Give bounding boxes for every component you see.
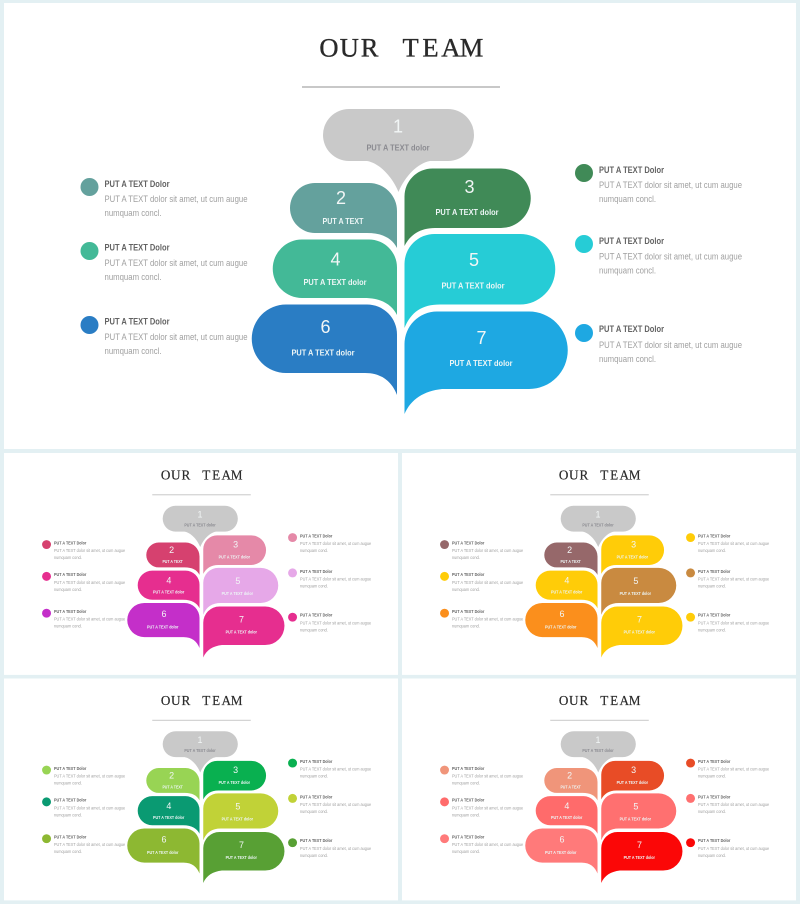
right item 2: PUT A TEXT dolor sit amet, ut cum augue: [599, 252, 742, 262]
left item 1: PUT A TEXT Dolor: [104, 179, 170, 189]
bubble 1: 1: [596, 509, 601, 519]
left item 2: PUT A TEXT Dolor: [54, 572, 87, 577]
right item 3: [575, 324, 742, 364]
left item 3: PUT A TEXT Dolor: [54, 834, 87, 839]
right item 1: PUT A TEXT dolor sit amet, ut cum augue: [698, 541, 770, 546]
right item 1: PUT A TEXT Dolor: [698, 534, 731, 539]
left item 1: [42, 540, 126, 560]
left item 1: PUT A TEXT dolor sit amet, ut cum augue: [104, 194, 248, 204]
bubble 5: 5: [469, 250, 479, 270]
left item 3: [440, 609, 524, 629]
bubble 1: PUT A TEXT dolor: [582, 522, 614, 527]
bubble 1: PUT A TEXT dolor: [582, 748, 614, 753]
left item 2: numquam concl.: [452, 812, 480, 817]
right item 3: [288, 838, 372, 858]
bubble 1: [323, 109, 474, 192]
right item 2: numquam concl.: [300, 809, 328, 814]
left item 2: numquam concl.: [54, 587, 82, 592]
left item 3: numquam concl.: [452, 624, 480, 629]
bubble 6: [525, 828, 598, 874]
bubble 2: 2: [336, 188, 346, 208]
right item 3: PUT A TEXT dolor sit amet, ut cum augue: [300, 621, 372, 626]
left item 3: [80, 316, 248, 356]
bubble 5: [601, 568, 676, 615]
left item 3: PUT A TEXT Dolor: [104, 316, 170, 326]
bubble 4: [138, 796, 200, 834]
right item 1: PUT A TEXT dolor sit amet, ut cum augue: [300, 541, 372, 546]
title: OUR TEAM: [161, 468, 243, 483]
left item 1: numquam concl.: [104, 208, 162, 218]
bubble 7: PUT A TEXT dolor: [226, 855, 257, 860]
right item 2: numquam concl.: [698, 584, 726, 589]
bubble 3: 3: [464, 177, 475, 197]
bubble 1: 1: [596, 735, 601, 745]
right item 2: PUT A TEXT dolor sit amet, ut cum augue: [698, 802, 770, 807]
left item 2: [440, 572, 524, 592]
right item 2: PUT A TEXT Dolor: [599, 236, 664, 246]
left item 2: numquam concl.: [452, 587, 480, 592]
right item 2: numquam concl.: [599, 266, 656, 276]
right item 1: numquam concl.: [698, 774, 726, 779]
right item 2: PUT A TEXT Dolor: [698, 569, 731, 574]
right item 1: [288, 533, 372, 553]
bubble 1: [561, 506, 636, 547]
bubble 3: 3: [233, 765, 238, 775]
title: OUR TEAM: [319, 33, 483, 63]
left item 2: PUT A TEXT dolor sit amet, ut cum augue: [452, 580, 524, 585]
bubble 7: [601, 832, 682, 883]
right item 3: PUT A TEXT Dolor: [599, 324, 664, 334]
bubble 2: PUT A TEXT: [322, 216, 364, 226]
title: OUR TEAM: [559, 693, 641, 708]
bubble 3: 3: [631, 540, 636, 550]
bubble 2: [544, 768, 598, 800]
right item 3: [686, 613, 770, 633]
bubble 7: PUT A TEXT dolor: [450, 358, 513, 368]
bubble 6: PUT A TEXT dolor: [147, 624, 179, 629]
left item 1: PUT A TEXT dolor sit amet, ut cum augue: [452, 548, 524, 553]
left item 3: numquam concl.: [54, 624, 82, 629]
title: OUR TEAM: [559, 468, 641, 483]
right item 2: [686, 568, 770, 589]
bubble 7: [203, 832, 284, 883]
left item 3: numquam concl.: [452, 849, 480, 854]
left item 1: [440, 540, 524, 560]
bubble 3: PUT A TEXT dolor: [617, 554, 648, 559]
bubble 1: [561, 731, 636, 773]
right item 1: [686, 759, 770, 779]
bubble 5: PUT A TEXT dolor: [222, 591, 253, 596]
bubble 5: 5: [633, 801, 638, 811]
left item 2: numquam concl.: [104, 272, 162, 282]
panel: main teal-blue slide: [4, 3, 796, 449]
left item 2: PUT A TEXT Dolor: [452, 798, 485, 803]
bubble 3: [203, 761, 266, 799]
bubble 1: [163, 506, 238, 547]
bubble 1: 1: [393, 116, 403, 136]
right item 3: PUT A TEXT Dolor: [300, 838, 333, 843]
bubble 2: 2: [169, 545, 174, 555]
bubble 2: 2: [169, 770, 174, 780]
right item 2: [686, 794, 770, 814]
left item 2: PUT A TEXT Dolor: [104, 242, 170, 252]
bubble 2: PUT A TEXT: [560, 559, 581, 564]
bubble 2: [146, 768, 200, 800]
right item 3: PUT A TEXT dolor sit amet, ut cum augue: [698, 846, 770, 851]
bubble 6: 6: [559, 609, 564, 619]
bubble 3: 3: [631, 765, 636, 775]
bubble 5: [601, 793, 676, 840]
bubble 5: PUT A TEXT dolor: [442, 280, 505, 290]
bubble 7: [601, 606, 682, 657]
bubble 7: 7: [637, 615, 642, 625]
bubble 4: 4: [166, 801, 171, 811]
right item 2: PUT A TEXT dolor sit amet, ut cum augue: [300, 802, 372, 807]
bubble 1: 1: [198, 509, 203, 519]
left item 2: [42, 572, 126, 592]
right item 3: PUT A TEXT dolor sit amet, ut cum augue: [599, 340, 742, 350]
bubble 4: 4: [564, 801, 569, 811]
bubble 3: [203, 535, 266, 574]
bubble 5: [203, 793, 278, 840]
right item 1: numquam concl.: [300, 774, 328, 779]
bubble 3: PUT A TEXT dolor: [617, 780, 648, 785]
right item 1: PUT A TEXT Dolor: [599, 165, 664, 175]
bubble 6: [252, 304, 397, 395]
right item 2: PUT A TEXT dolor sit amet, ut cum augue: [698, 577, 770, 582]
left item 3: PUT A TEXT dolor sit amet, ut cum augue: [54, 617, 126, 622]
bubble 7: PUT A TEXT dolor: [624, 855, 655, 860]
bubble 2: 2: [567, 545, 572, 555]
right item 1: numquam concl.: [599, 194, 656, 204]
bubble 4: [536, 571, 598, 608]
bubble 4: PUT A TEXT dolor: [153, 589, 185, 594]
bubble 6: 6: [320, 317, 331, 337]
bubble 1: PUT A TEXT dolor: [184, 748, 216, 753]
left item 3: PUT A TEXT Dolor: [452, 834, 485, 839]
right item 1: PUT A TEXT dolor sit amet, ut cum augue: [599, 180, 742, 190]
bubble 6: [127, 603, 200, 648]
right item 1: [288, 759, 372, 779]
panel: green slide: [4, 678, 398, 900]
bubble 3: PUT A TEXT dolor: [436, 207, 499, 217]
left item 1: [42, 766, 126, 785]
panel: red slide: [402, 678, 796, 900]
right item 2: numquam concl.: [698, 809, 726, 814]
left item 1: PUT A TEXT Dolor: [452, 766, 485, 771]
right item 1: PUT A TEXT Dolor: [698, 759, 731, 764]
bubble 1: [163, 731, 238, 773]
right item 2: PUT A TEXT Dolor: [300, 569, 333, 574]
left item 2: numquam concl.: [54, 812, 82, 817]
left item 1: PUT A TEXT Dolor: [54, 766, 87, 771]
bubble 2: PUT A TEXT: [560, 784, 581, 789]
left item 3: PUT A TEXT Dolor: [452, 609, 485, 614]
right item 3: PUT A TEXT Dolor: [698, 838, 731, 843]
right item 3: PUT A TEXT dolor sit amet, ut cum augue: [300, 846, 372, 851]
title: OUR TEAM: [161, 693, 243, 708]
right item 3: [686, 838, 770, 858]
right item 1: PUT A TEXT Dolor: [300, 759, 333, 764]
left item 2: PUT A TEXT dolor sit amet, ut cum augue: [452, 805, 524, 810]
bubble 5: 5: [633, 576, 638, 586]
right item 2: numquam concl.: [300, 584, 328, 589]
right item 2: [288, 568, 372, 589]
left item 3: PUT A TEXT dolor sit amet, ut cum augue: [452, 617, 524, 622]
bubble 1: PUT A TEXT dolor: [366, 142, 430, 152]
right item 3: PUT A TEXT Dolor: [300, 613, 333, 618]
left item 1: numquam concl.: [54, 555, 82, 560]
right item 3: PUT A TEXT dolor sit amet, ut cum augue: [698, 621, 770, 626]
bubble 6: PUT A TEXT dolor: [147, 850, 179, 855]
bubble 2: PUT A TEXT: [162, 784, 183, 789]
bubble 5: 5: [235, 801, 240, 811]
left item 1: PUT A TEXT dolor sit amet, ut cum augue: [54, 774, 126, 779]
bubble 6: 6: [161, 609, 166, 619]
left item 2: PUT A TEXT dolor sit amet, ut cum augue: [54, 805, 126, 810]
left item 3: PUT A TEXT dolor sit amet, ut cum augue: [54, 842, 126, 847]
left item 1: PUT A TEXT Dolor: [452, 541, 485, 546]
right item 3: numquam concl.: [300, 853, 328, 858]
right item 3: PUT A TEXT Dolor: [698, 613, 731, 618]
bubble 3: 3: [233, 540, 238, 550]
left item 3: [42, 609, 126, 629]
right item 2: PUT A TEXT Dolor: [300, 794, 333, 799]
left item 1: [440, 766, 524, 785]
bubble 3: [404, 168, 531, 246]
left item 2: PUT A TEXT dolor sit amet, ut cum augue: [54, 580, 126, 585]
bubble 6: [127, 828, 200, 874]
right item 2: PUT A TEXT dolor sit amet, ut cum augue: [300, 577, 372, 582]
bubble 3: [601, 761, 664, 799]
left item 3: [42, 834, 126, 854]
left item 2: PUT A TEXT dolor sit amet, ut cum augue: [104, 258, 248, 268]
right item 3: numquam concl.: [300, 628, 328, 633]
bubble 5: 5: [235, 576, 240, 586]
bubble 2: [544, 543, 598, 575]
right item 3: numquam concl.: [599, 354, 656, 364]
left item 3: [440, 834, 524, 854]
bubble 5: PUT A TEXT dolor: [222, 817, 253, 822]
bubble 3: PUT A TEXT dolor: [219, 780, 250, 785]
left item 1: numquam concl.: [452, 780, 480, 785]
bubble 6: PUT A TEXT dolor: [545, 850, 577, 855]
bubble 5: PUT A TEXT dolor: [620, 591, 651, 596]
left item 3: PUT A TEXT Dolor: [54, 609, 87, 614]
bubble 4: [138, 571, 200, 608]
bubble 5: PUT A TEXT dolor: [620, 817, 651, 822]
right item 2: [288, 794, 372, 814]
right item 3: [288, 613, 372, 633]
left item 1: [80, 178, 248, 218]
right item 3: numquam concl.: [698, 628, 726, 633]
bubble 1: PUT A TEXT dolor: [184, 522, 216, 527]
left item 3: PUT A TEXT dolor sit amet, ut cum augue: [104, 332, 248, 342]
right item 2: PUT A TEXT Dolor: [698, 794, 731, 799]
bubble 4: 4: [166, 576, 171, 586]
right item 1: numquam concl.: [300, 548, 328, 553]
panel: yellow-orange slide: [402, 453, 796, 675]
bubble 4: [536, 796, 598, 834]
bubble 6: [525, 603, 598, 648]
bubble 4: PUT A TEXT dolor: [153, 815, 185, 820]
right item 2: [575, 235, 742, 276]
right item 1: numquam concl.: [698, 548, 726, 553]
bubble 4: PUT A TEXT dolor: [551, 815, 583, 820]
bubble 7: 7: [239, 615, 244, 625]
bubble 7: 7: [637, 840, 642, 850]
bubble 4: 4: [564, 576, 569, 586]
right item 1: [686, 533, 770, 553]
left item 2: [80, 242, 248, 282]
bubble 2: PUT A TEXT: [162, 559, 183, 564]
left item 1: PUT A TEXT Dolor: [54, 541, 87, 546]
right item 1: PUT A TEXT Dolor: [300, 534, 333, 539]
right item 1: [575, 164, 742, 204]
bubble 4: 4: [330, 250, 341, 270]
bubble 3: [601, 535, 664, 574]
bubble 7: PUT A TEXT dolor: [624, 630, 655, 635]
bubble 6: PUT A TEXT dolor: [545, 624, 577, 629]
left item 3: numquam concl.: [104, 346, 162, 356]
bubble 6: 6: [559, 835, 564, 845]
bubble 2: [146, 543, 200, 575]
left item 3: numquam concl.: [54, 849, 82, 854]
left item 1: PUT A TEXT dolor sit amet, ut cum augue: [54, 548, 126, 553]
left item 2: [440, 797, 524, 817]
bubble 7: [203, 606, 284, 657]
bubble 7: [404, 312, 568, 414]
left item 2: PUT A TEXT Dolor: [452, 572, 485, 577]
bubble 2: 2: [567, 770, 572, 780]
bubble 4: [273, 240, 397, 315]
bubble 4: PUT A TEXT dolor: [304, 277, 367, 287]
right item 1: PUT A TEXT dolor sit amet, ut cum augue: [698, 767, 770, 772]
bubble 7: PUT A TEXT dolor: [226, 630, 257, 635]
left item 2: [42, 797, 126, 817]
bubble 6: PUT A TEXT dolor: [292, 348, 355, 358]
bubble 7: 7: [476, 328, 487, 348]
bubble 3: PUT A TEXT dolor: [219, 554, 250, 559]
left item 1: numquam concl.: [452, 555, 480, 560]
bubble 7: 7: [239, 840, 244, 850]
right item 1: PUT A TEXT dolor sit amet, ut cum augue: [300, 767, 372, 772]
left item 1: numquam concl.: [54, 780, 82, 785]
bubble 4: PUT A TEXT dolor: [551, 589, 583, 594]
bubble 1: 1: [198, 735, 203, 745]
bubble 5: [203, 568, 278, 615]
right item 3: numquam concl.: [698, 853, 726, 858]
bubble 2: [290, 183, 397, 248]
left item 2: PUT A TEXT Dolor: [54, 798, 87, 803]
left item 1: PUT A TEXT dolor sit amet, ut cum augue: [452, 774, 524, 779]
panel: pink slide: [4, 453, 398, 675]
left item 3: PUT A TEXT dolor sit amet, ut cum augue: [452, 842, 524, 847]
bubble 5: [404, 234, 555, 328]
bubble 6: 6: [161, 835, 166, 845]
